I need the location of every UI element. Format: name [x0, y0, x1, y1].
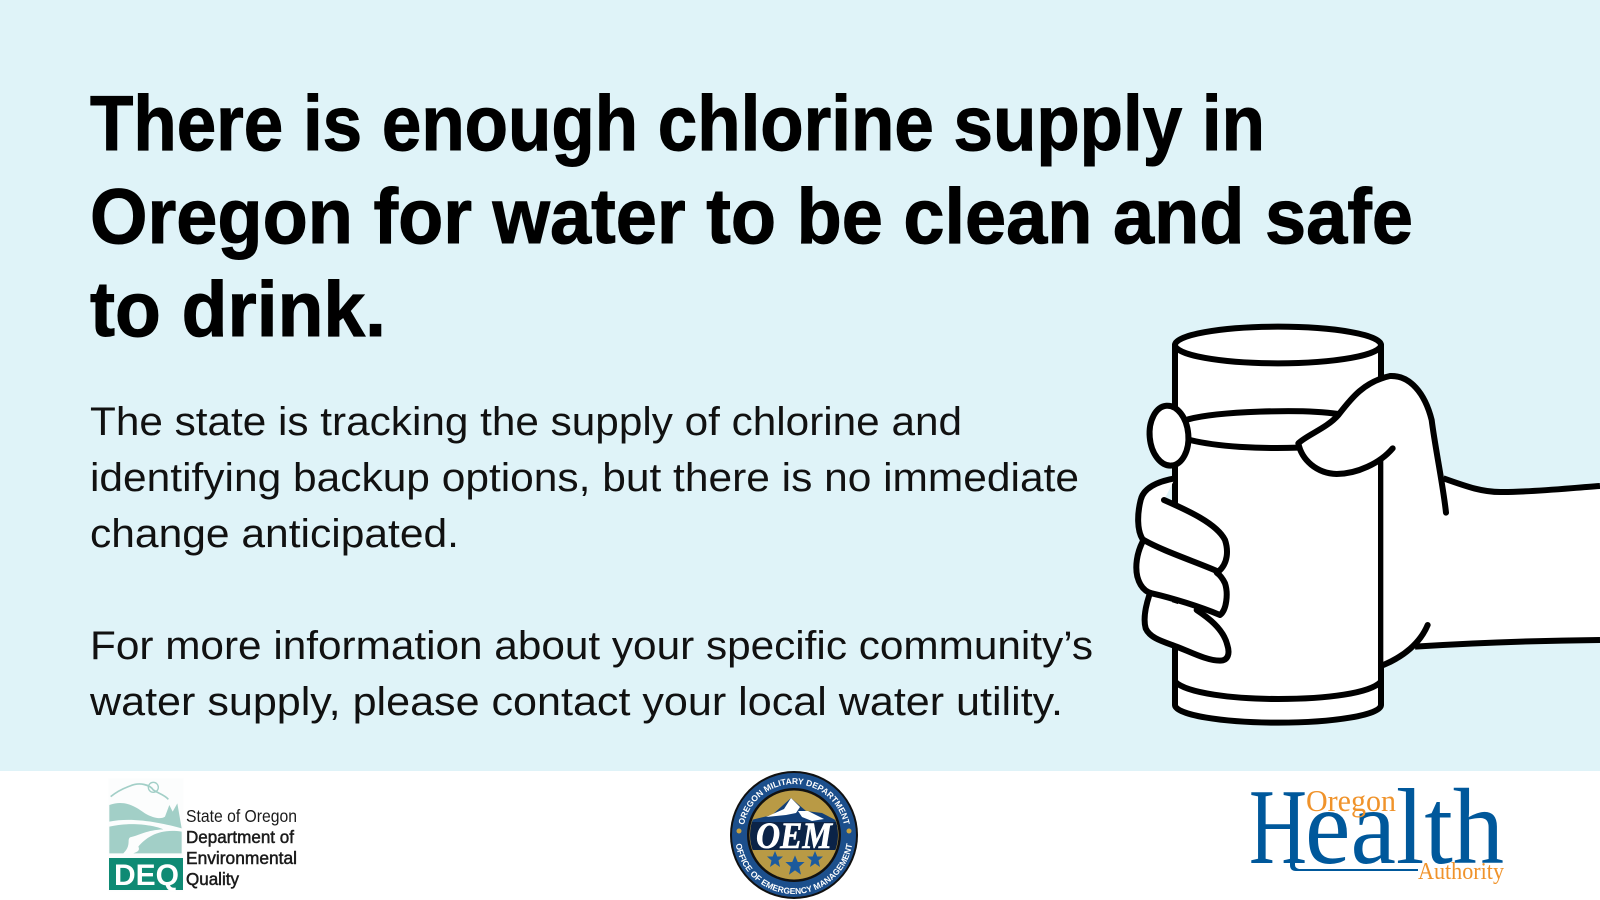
- text block: tracking statement: identifying backup options, but there is no immediate: [90, 456, 1079, 500]
- DEQ name: [186, 806, 297, 889]
- OEM letters: OEM: [756, 816, 833, 857]
- glass base band: [1175, 682, 1381, 699]
- DEQ name: Quality: [186, 869, 239, 889]
- title: [90, 79, 1413, 353]
- inner circle: [747, 788, 841, 882]
- gold field: [747, 788, 841, 882]
- DEQ name: Environmental: [186, 848, 297, 868]
- thumb: [1298, 376, 1446, 513]
- second finger: [1136, 542, 1227, 615]
- ring dots: [736, 828, 852, 834]
- Health wordmark: ealth: [1305, 768, 1504, 887]
- glass rim: [1175, 327, 1381, 363]
- DEQ name: State of Oregon: [186, 806, 297, 826]
- stars: [767, 851, 823, 875]
- ring text: [736, 778, 852, 894]
- text block: tracking statement: The state is tracking the supply of chlorine and: [90, 400, 962, 444]
- text block: contact information: [89, 624, 1093, 724]
- mountain: [747, 798, 841, 827]
- title: Oregon for water to be clean and safe: [90, 172, 1413, 260]
- title: to drink.: [90, 265, 386, 353]
- third finger: [1145, 595, 1229, 661]
- DEQ landscape artwork: [108, 778, 183, 892]
- text block: contact information: water supply, please contact your local water utility.: [89, 680, 1063, 724]
- logo: Oregon Military Department OEM seal: [730, 771, 858, 899]
- arm lower edge: [1415, 640, 1600, 647]
- DEQ name: Department of: [186, 827, 294, 847]
- logo: Oregon DEQ: [108, 778, 297, 892]
- ring text: OFFICE OF EMERGENCY MANAGEMENT: [736, 843, 852, 894]
- text block: contact information: For more information about your specific community’s: [90, 624, 1093, 668]
- fingertip oval: [1147, 404, 1191, 467]
- DEQ green box: DEQ: [114, 859, 179, 892]
- panel: white logo strip: [0, 771, 1600, 900]
- arm upper edge: [1443, 478, 1600, 492]
- Authority word: Authority: [1418, 859, 1504, 885]
- water line: [1188, 411, 1338, 448]
- palm heel: [1383, 625, 1428, 665]
- Oregon word: Oregon: [1306, 783, 1396, 818]
- text block: tracking statement: change anticipated.: [90, 512, 459, 556]
- seal ring: [730, 771, 858, 899]
- logo: Oregon Health Authority: [1249, 768, 1504, 887]
- title: There is enough chlorine supply in: [90, 79, 1265, 167]
- icon: hand holding a glass of water: [1136, 327, 1600, 723]
- Health wordmark: H: [1249, 768, 1307, 887]
- palm and arm fill: [1298, 376, 1600, 665]
- first finger: [1138, 478, 1227, 572]
- ring text: OREGON MILITARY DEPARTMENT: [738, 778, 850, 824]
- name band: [747, 822, 841, 850]
- glass body: [1175, 345, 1381, 723]
- text block: tracking statement: [90, 400, 1079, 556]
